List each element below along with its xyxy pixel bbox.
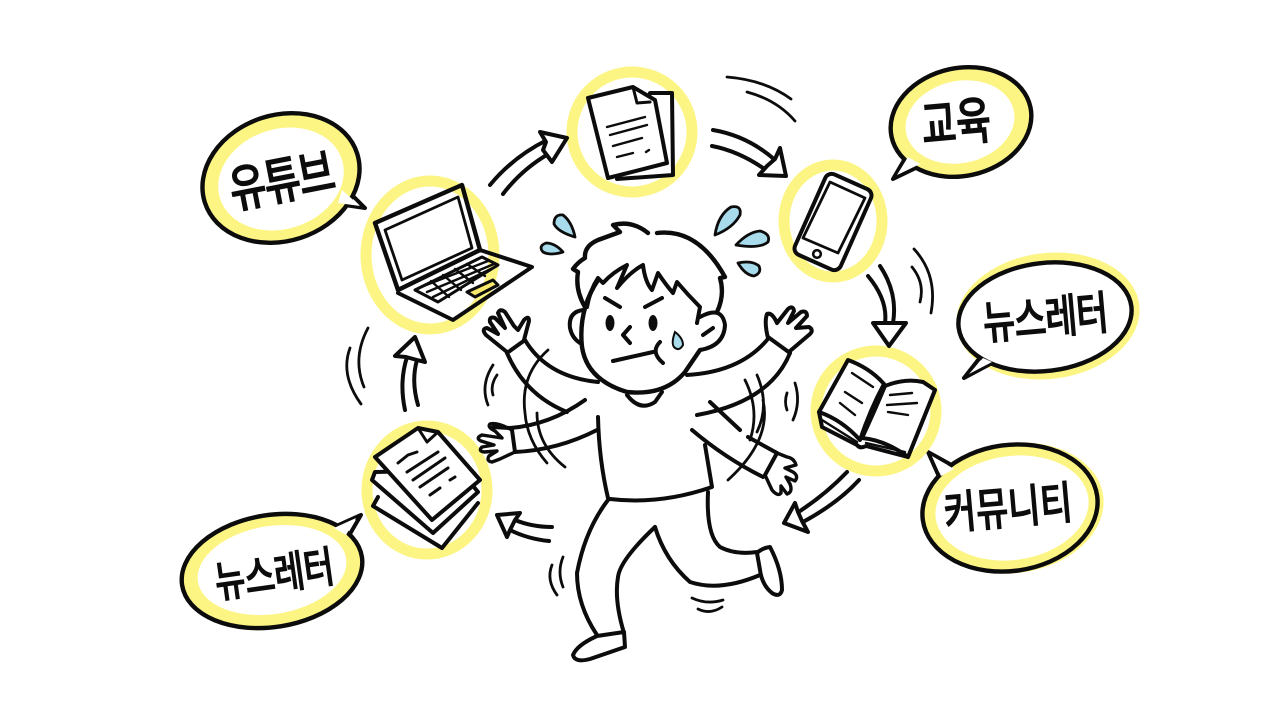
icon: sweat drops [541,207,769,276]
person: arms and hands [478,307,812,494]
speech bubble: newsletter right: 뉴스레터 [981,287,1110,350]
arrow: book to person [784,472,859,532]
arrow: phone to book [868,266,906,346]
shoe: left [573,632,625,660]
speech bubble: community [914,431,1112,585]
arrow: person to papers [497,513,552,541]
icon: open book in yellow ring [816,351,936,471]
speech bubble: newsletter left: 뉴스레터 [212,543,337,608]
hair [573,224,725,312]
person: head [570,224,725,406]
speech bubble: newsletter right [949,242,1147,390]
ears [570,310,725,350]
shoe: right [757,547,782,595]
person: body and legs [573,417,782,660]
fringe [587,265,700,323]
speech bubble: community: 커뮤니티 [942,477,1074,539]
speech bubble: education [880,54,1042,190]
icon: laptop in yellow ring [366,181,532,329]
icon: documents in yellow ring [572,72,692,192]
speech bubble: YouTube [185,93,377,263]
speech bubble: YouTube: 유튜브 [224,143,339,219]
eyes [606,315,614,331]
speech bubble: newsletter left [173,501,371,641]
brows, nose and mouth [605,298,663,363]
neck [627,392,662,406]
arrow: document to phone [712,130,786,176]
arrow: laptop to document [490,132,567,194]
motion lines [347,77,933,612]
icon: stack of papers in yellow ring [367,426,487,554]
icon: smartphone in yellow ring [784,165,882,277]
arrow: papers to laptop [395,337,425,410]
cheek sweat [673,332,683,349]
speech bubble: education: 교육 [919,91,993,155]
